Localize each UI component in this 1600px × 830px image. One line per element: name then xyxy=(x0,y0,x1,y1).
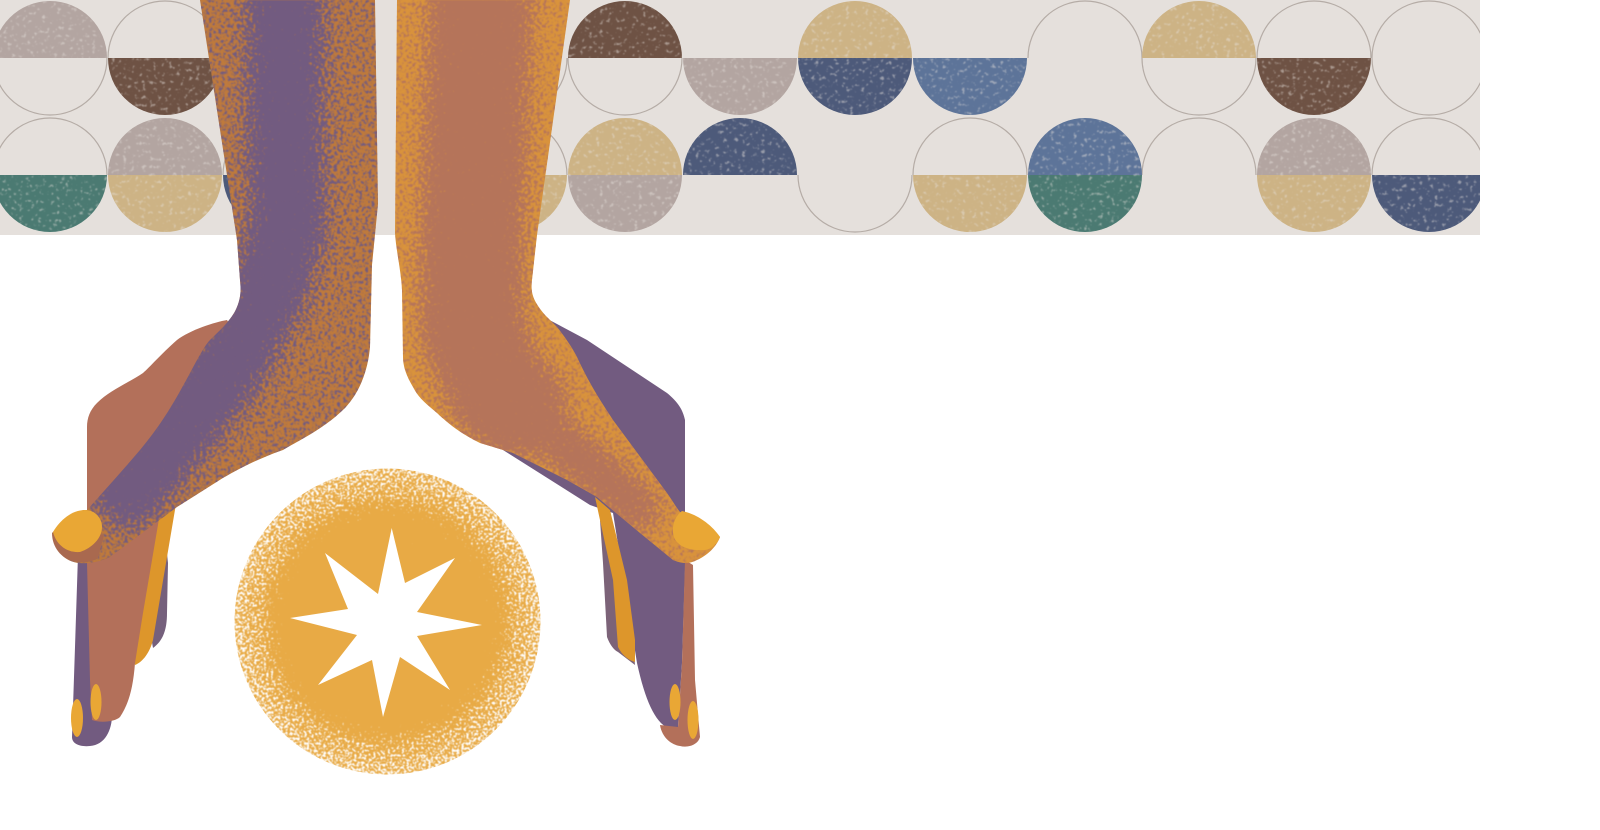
orange finger xyxy=(595,497,635,662)
left hand xyxy=(0,0,460,746)
back finger, grainy purple xyxy=(600,520,635,665)
purple finger under the brown finger xyxy=(72,555,112,746)
purple back of hand and finger xyxy=(503,315,685,728)
brown outer finger xyxy=(660,560,700,747)
pattern: filled half circles xyxy=(0,1,1486,232)
thumbnail xyxy=(673,511,720,550)
thumb tip shadow xyxy=(52,525,104,562)
orange finger xyxy=(130,498,177,665)
right hand xyxy=(340,0,770,747)
fingernails xyxy=(90,684,102,720)
right arm and thumb xyxy=(395,0,720,563)
brown back of hand and finger xyxy=(87,320,240,722)
left arm and thumb xyxy=(63,0,378,564)
pattern: half-circle outlines xyxy=(0,1,1486,232)
panel: geometric band background xyxy=(0,0,1480,235)
back finger, grainy purple xyxy=(148,535,168,648)
fingernails xyxy=(670,684,680,720)
thumbnail xyxy=(53,510,102,552)
icon: glowing sun disc with eight-point star xyxy=(228,462,548,782)
